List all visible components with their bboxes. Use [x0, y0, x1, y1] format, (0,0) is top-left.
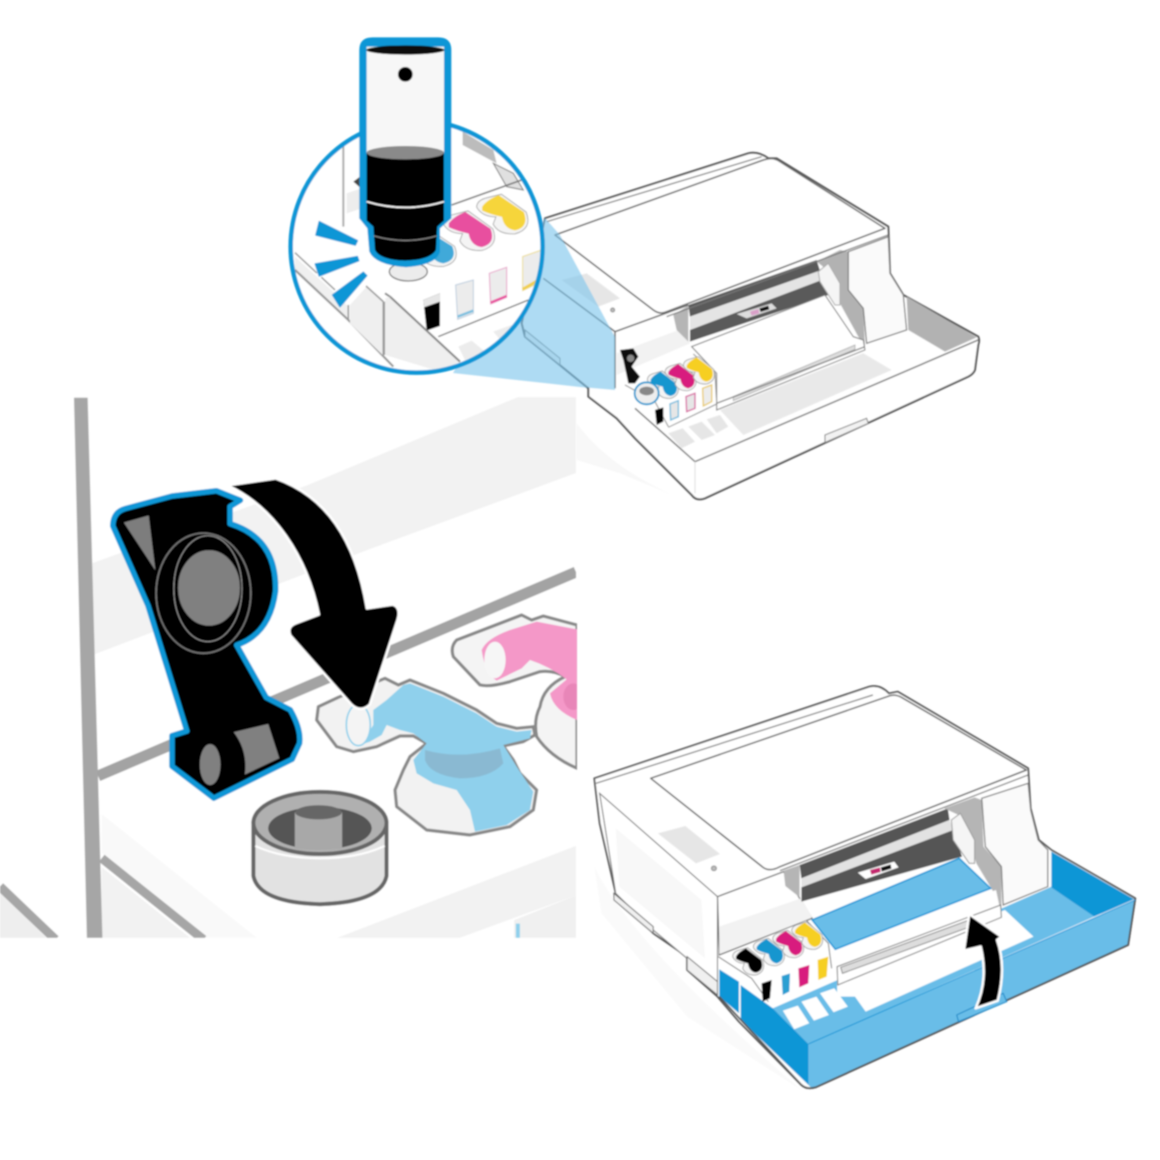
body front tint — [719, 898, 812, 954]
lower right tank edge — [438, 300, 528, 337]
cyan cap — [317, 678, 537, 835]
lever with blue outline — [113, 491, 300, 798]
circle outline — [291, 121, 543, 373]
cyan opening — [346, 704, 370, 746]
paper on floor — [837, 910, 1034, 1012]
tray floor — [720, 353, 892, 435]
control panel patch — [562, 273, 620, 307]
front panel edge — [390, 297, 460, 362]
paper guide — [818, 263, 840, 305]
far tank corner — [514, 895, 576, 940]
dark band lower — [801, 830, 962, 902]
body edges — [543, 278, 688, 388]
dark band upper — [688, 260, 820, 317]
cap top — [253, 792, 387, 854]
callout projection cone — [453, 218, 615, 390]
output rail — [733, 345, 855, 401]
printer shell — [594, 686, 1135, 1088]
tank top — [718, 921, 828, 978]
yellow cap — [792, 922, 823, 949]
panel: close-up of lever and cap — [0, 397, 576, 940]
shell side panel — [350, 287, 383, 355]
rail — [98, 572, 576, 776]
lower strut — [102, 858, 203, 940]
head ink black — [759, 306, 769, 312]
left foot — [525, 330, 560, 365]
far tank edge — [516, 924, 520, 940]
tank side edge — [384, 292, 392, 298]
power button — [611, 308, 615, 312]
floor squares — [783, 988, 848, 1029]
floor square 2 — [493, 325, 520, 342]
roller end — [200, 744, 220, 785]
yellow window — [818, 957, 828, 980]
illustration: printer with tray highlighted, bottom right — [594, 686, 1135, 1090]
foot right — [687, 957, 717, 995]
panel left edge — [383, 302, 385, 355]
side panel tint — [616, 828, 705, 958]
illustration: printer with ink tanks, top right — [522, 153, 979, 505]
head label — [737, 303, 777, 318]
yellow window — [703, 385, 712, 406]
output tray front — [837, 905, 1001, 985]
hub disc — [178, 550, 240, 626]
magenta cap — [773, 930, 804, 958]
pink ink — [482, 622, 577, 720]
seat under bottle — [389, 262, 427, 281]
lower band — [333, 846, 576, 940]
head label — [858, 862, 899, 879]
blue paper — [812, 858, 991, 949]
arrow: close tray — [964, 914, 1002, 1008]
ink bottle — [359, 37, 451, 267]
tray rim — [809, 900, 1135, 1044]
bottle ink body — [367, 153, 444, 261]
ink surface — [367, 146, 444, 159]
shell front panel — [385, 297, 460, 372]
floor shadow — [594, 867, 801, 1090]
black lever glimpse — [352, 176, 361, 188]
cyan cap — [426, 236, 458, 268]
wall tint — [346, 190, 360, 213]
black window — [655, 407, 663, 425]
tray front face — [809, 900, 1135, 1088]
yellow cap — [683, 357, 714, 384]
cyan ink — [360, 683, 533, 832]
bottle rim — [366, 45, 444, 55]
yellow window — [523, 250, 542, 291]
pink cap — [452, 615, 583, 768]
tray back left — [719, 969, 739, 1013]
cyan window — [782, 973, 790, 995]
lid — [651, 695, 1026, 870]
ink tanks on bottom printer — [718, 921, 832, 1002]
carriage strip — [690, 271, 822, 330]
floor shadow — [577, 423, 697, 505]
step band — [102, 814, 259, 940]
cyan window — [456, 280, 473, 319]
cyan hub — [425, 748, 503, 778]
circle fill — [291, 121, 543, 373]
right tower — [982, 783, 1048, 905]
bottle outline — [359, 37, 451, 267]
ink tanks on top printer — [620, 348, 717, 427]
right tower — [848, 237, 907, 343]
pink opening — [484, 642, 506, 678]
head ink magenta — [870, 867, 881, 875]
cyan outline — [317, 678, 537, 835]
cap body — [253, 823, 387, 904]
foot — [614, 893, 653, 933]
tray outline — [719, 898, 1135, 1088]
post top — [295, 805, 342, 819]
tray rim — [635, 340, 978, 462]
top right block — [463, 132, 497, 163]
slot left wall — [784, 865, 800, 897]
tray floor — [773, 887, 1094, 1044]
body left face — [600, 793, 717, 992]
black window — [762, 980, 772, 1002]
lid back line — [596, 695, 1028, 871]
hub ring — [156, 533, 251, 653]
cap gap line — [255, 846, 385, 858]
cyan window — [670, 401, 678, 420]
tray right wall — [1051, 852, 1134, 917]
right ledge — [493, 163, 523, 190]
highlight ring around cap — [635, 382, 659, 404]
shell light band — [295, 257, 348, 320]
black lever — [620, 348, 640, 383]
bottle dot — [398, 67, 413, 82]
floor squares — [668, 415, 728, 448]
tray handle — [825, 418, 868, 443]
slot left wall — [673, 306, 688, 342]
pink hub — [564, 684, 577, 710]
lid — [555, 159, 885, 313]
tank front — [752, 943, 832, 1000]
black window — [423, 293, 440, 331]
left strut — [0, 887, 55, 940]
bottle clear top — [367, 47, 444, 155]
paper white strip — [835, 890, 1001, 975]
magenta window — [686, 393, 695, 412]
side wall — [817, 250, 865, 347]
lower left panel — [102, 867, 192, 940]
rail — [452, 180, 522, 205]
far left panel — [0, 894, 45, 938]
tank front — [655, 373, 717, 427]
body front — [717, 872, 812, 955]
tray front seam — [694, 462, 696, 493]
tank edges — [625, 354, 717, 427]
output rails — [841, 921, 969, 973]
magenta window — [489, 267, 507, 304]
carriage strip — [801, 820, 953, 887]
shell line outer — [295, 270, 393, 367]
cyan cap — [753, 938, 784, 966]
collar line — [367, 202, 444, 207]
paper sheet — [692, 295, 865, 410]
arrow: rotate lever down — [227, 478, 399, 709]
close-up foreground — [113, 478, 399, 904]
right wall — [944, 797, 1001, 911]
printer shell — [522, 153, 979, 499]
body lower front — [617, 328, 690, 375]
cap post — [295, 812, 342, 850]
hub highlight — [174, 536, 242, 642]
side panel edges — [348, 286, 383, 355]
roller — [234, 724, 279, 774]
yellow cap — [477, 194, 528, 234]
output edge — [717, 347, 865, 403]
black cap — [733, 948, 764, 975]
callout circle: bottle on tank — [291, 37, 543, 373]
wall band — [92, 397, 576, 655]
head ink marks — [750, 309, 759, 316]
dark band lower — [690, 280, 828, 342]
magenta cap — [665, 363, 696, 391]
paper guide — [951, 813, 975, 863]
dark band upper — [800, 808, 950, 878]
background — [109, 487, 576, 907]
cap icon — [639, 387, 654, 395]
spark lines — [315, 222, 367, 307]
magenta window — [798, 965, 809, 987]
vertical post — [74, 398, 102, 940]
floor square — [458, 341, 485, 360]
caps in close-up — [317, 615, 583, 835]
lid back line — [547, 157, 888, 317]
tray handle — [957, 993, 1007, 1022]
neck line — [374, 236, 437, 240]
head ink black — [881, 864, 891, 872]
tank top — [625, 354, 715, 402]
tank edges — [718, 921, 832, 1002]
magenta cap — [443, 211, 495, 251]
shell line upper — [295, 253, 335, 290]
cyan cap — [647, 371, 678, 398]
small removed cap — [253, 792, 387, 904]
control panel patch — [658, 826, 720, 863]
power button — [711, 866, 716, 871]
lever gray face — [124, 515, 155, 570]
vertical post — [342, 145, 344, 227]
tray left wall — [741, 985, 809, 1085]
tray back wall — [907, 297, 977, 352]
pink outline — [452, 615, 577, 768]
lever hub — [627, 355, 634, 362]
lever body — [113, 491, 300, 798]
cap well — [268, 807, 372, 849]
